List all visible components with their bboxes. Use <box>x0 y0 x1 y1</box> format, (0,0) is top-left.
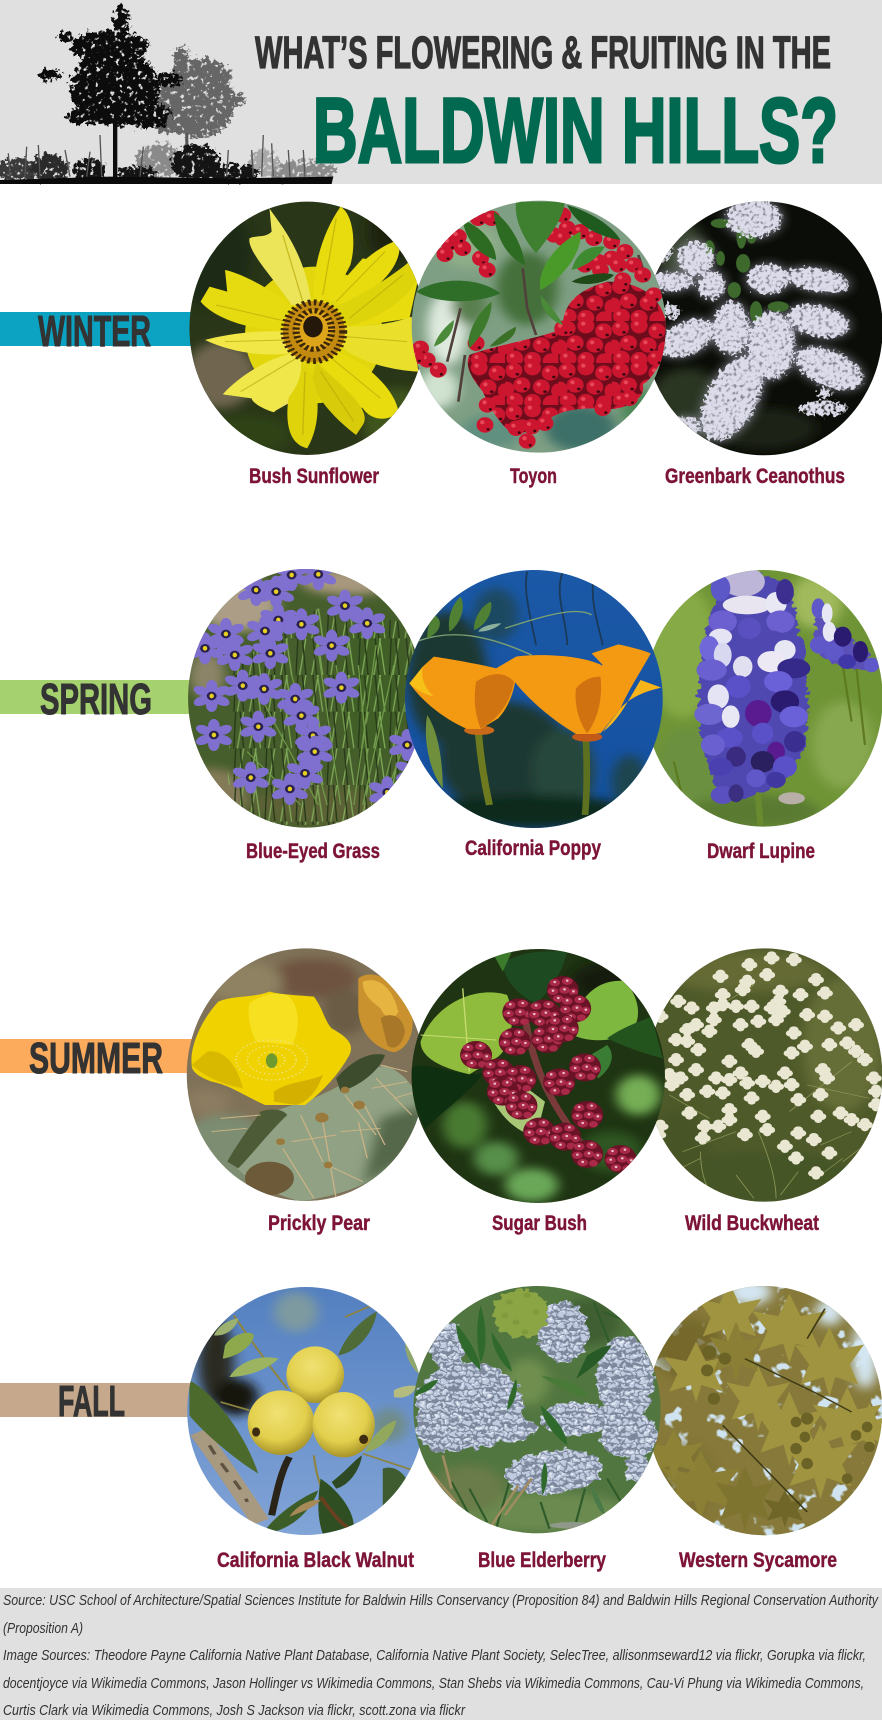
photos row: fall <box>185 1279 882 1549</box>
label: Blue-Eyed Grass: Blue-Eyed Grass <box>246 840 380 863</box>
photo: sugar bush <box>407 945 674 1212</box>
photo: western sycamore <box>653 1286 882 1536</box>
season bar: spring: SPRING <box>40 675 152 724</box>
season bar: fall <box>0 1377 192 1426</box>
label: Wild Buckwheat: Wild Buckwheat <box>685 1212 819 1235</box>
season bar: winter: WINTER <box>38 307 151 356</box>
label: California Black Walnut: California Black Walnut <box>217 1549 414 1572</box>
season bar: fall: FALL <box>58 1377 125 1426</box>
panel: spring <box>0 558 882 863</box>
photos row: summer <box>176 945 882 1212</box>
label: Dwarf Lupine: Dwarf Lupine <box>707 840 815 863</box>
image sources line 3: Curtis Clark via Wikimedia Commons, Josh S Jackson via flickr, scott.zona via flickr <box>3 1702 466 1719</box>
photo: california black walnut <box>187 1287 420 1535</box>
photo: wild buckwheat <box>655 948 882 1202</box>
illustration: tree silhouettes <box>0 5 337 184</box>
source text continued: (Proposition A) <box>3 1620 83 1637</box>
label: Bush Sunflower: Bush Sunflower <box>249 465 379 488</box>
photo: blue elderberry <box>413 1286 660 1534</box>
label: Sugar Bush: Sugar Bush <box>492 1212 587 1235</box>
photo: bush sunflower <box>189 202 419 455</box>
season bar: summer: SUMMER <box>29 1034 163 1083</box>
photos row: spring <box>176 558 882 832</box>
panel: winter <box>0 195 882 488</box>
label: Blue Elderberry: Blue Elderberry <box>478 1549 606 1572</box>
photo: prickly pear <box>186 948 419 1201</box>
label: Greenbark Ceanothus: Greenbark Ceanothus <box>665 465 845 488</box>
label: Prickly Pear: Prickly Pear <box>268 1212 370 1235</box>
panel: summer <box>0 945 882 1235</box>
panel: fall <box>0 1279 882 1572</box>
label: California Poppy: California Poppy <box>465 837 601 860</box>
photos row: winter <box>172 195 882 462</box>
header banner <box>0 0 882 184</box>
photo: blue-eyed grass <box>188 569 415 828</box>
photo: toyon <box>407 195 674 462</box>
label: Toyon: Toyon <box>510 465 557 488</box>
footer: sources <box>0 1588 882 1720</box>
photo: dwarf lupine <box>638 565 882 832</box>
photo: california poppy <box>398 565 674 832</box>
photo: greenbark ceanothus <box>654 201 882 456</box>
label: Western Sycamore: Western Sycamore <box>679 1549 837 1572</box>
